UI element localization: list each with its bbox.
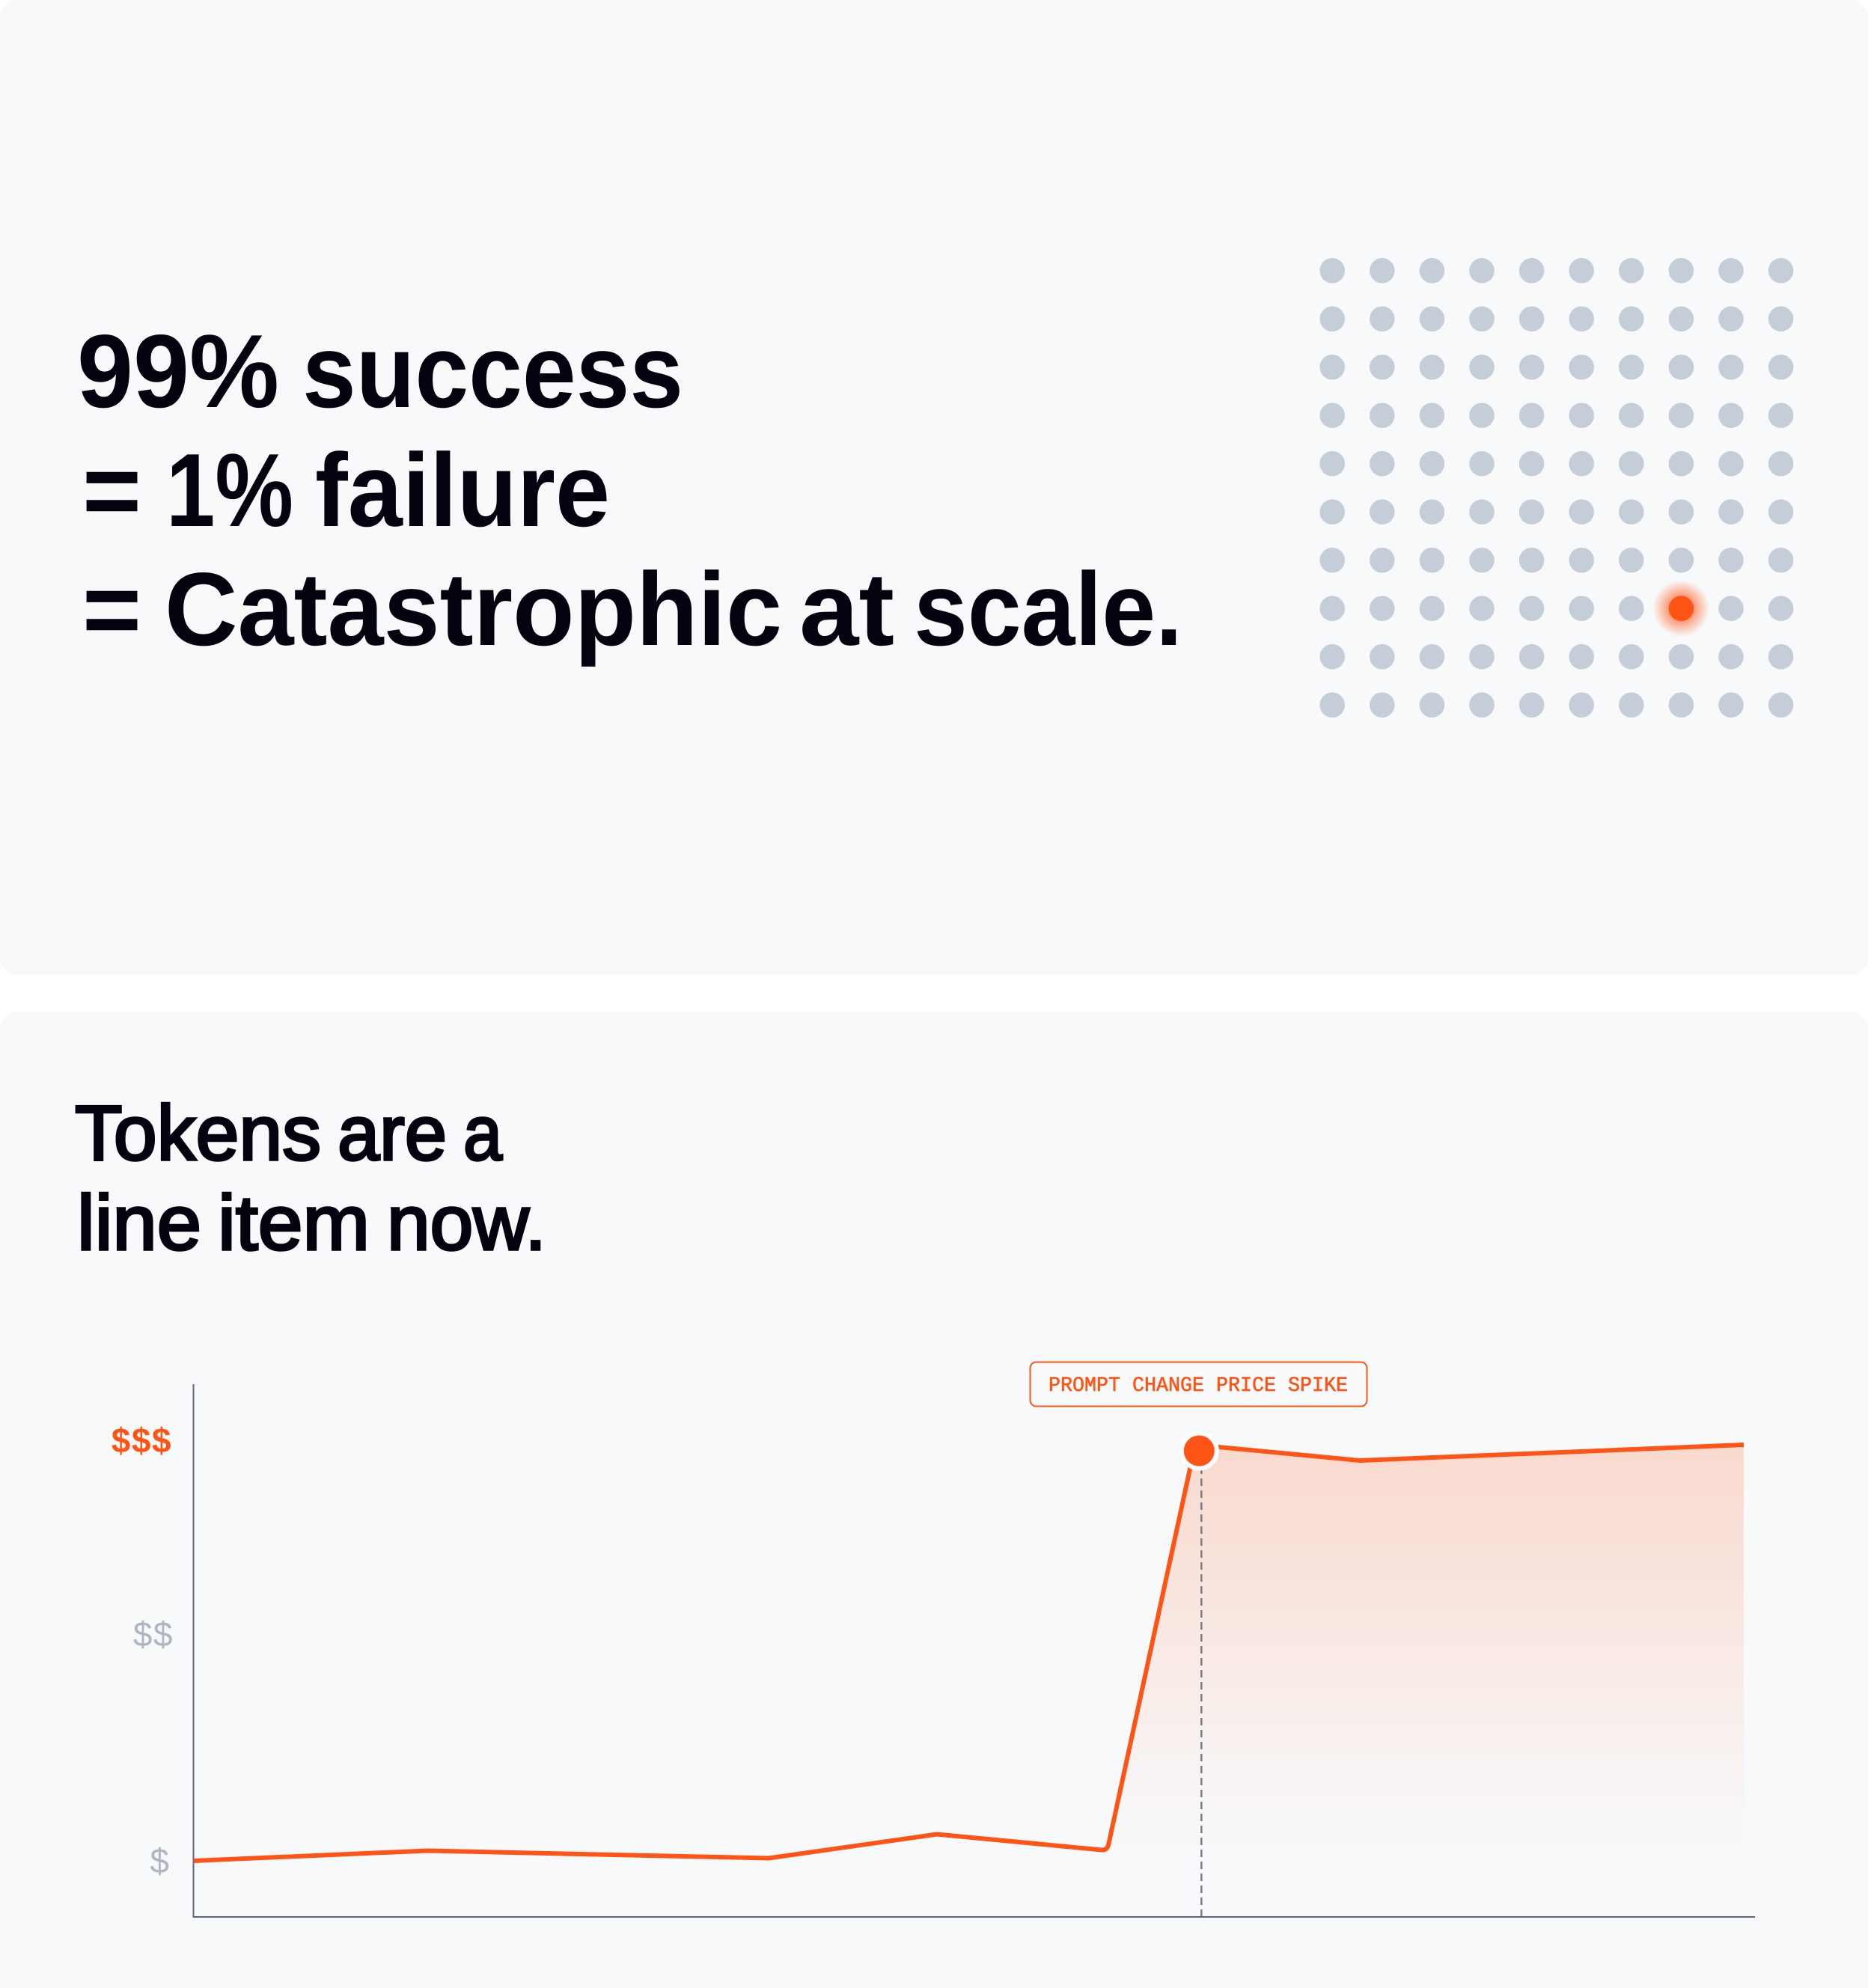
spike point [1182,1434,1217,1468]
heading: 99% success = 1% failure = catastrophic at scale: success [302,314,683,429]
heading: 99% success = 1% failure = catastrophic at scale: at [799,551,894,667]
heading: tokens are a line item now: line [77,1180,201,1267]
panel: 99% success [0,0,1868,975]
axis label: medium cost: $$ [133,1615,174,1654]
panel: tokens chart [0,1012,1868,1988]
failed dot with glow [1652,580,1709,637]
axis label: high cost: $$$ [112,1421,172,1460]
heading: 99% success = 1% failure = catastrophic at scale: scale. [914,551,1182,667]
heading: tokens are a line item now [75,1090,546,1267]
heading: 99% success = 1% failure = catastrophic at scale: = [82,432,141,548]
axes [193,1384,1755,1917]
dashed marker line [1200,1466,1203,1920]
callout: prompt change price spike: PROMPT CHANGE PRICE SPIKE [1049,1374,1348,1398]
area under spike [1106,1445,1744,1850]
heading: 99% success = 1% failure = catastrophic at scale [77,314,1182,667]
line chart: cost over time [112,1362,1755,1920]
heading: tokens are a line item now: now. [387,1180,546,1267]
heading: 99% success = 1% failure = catastrophic at scale: 1% [166,432,293,548]
axis label: low cost: $ [150,1841,169,1880]
heading: 99% success = 1% failure = catastrophic at scale: failure [315,432,610,548]
heading: tokens are a line item now: Tokens [75,1090,321,1177]
heading: 99% success = 1% failure = catastrophic at scale: = [82,551,141,667]
heading: tokens are a line item now: are [338,1090,447,1177]
cost line [194,1445,1744,1861]
heading: 99% success = 1% failure = catastrophic at scale: 99% [77,314,279,429]
heading: 99% success = 1% failure = catastrophic at scale: Catastrophic [165,551,782,667]
callout: prompt change price spike [1030,1362,1367,1407]
heading: tokens are a line item now: item [218,1180,370,1267]
heading: tokens are a line item now: a [463,1090,502,1177]
dot grid: 100 outcomes with one failure [1319,258,1793,718]
